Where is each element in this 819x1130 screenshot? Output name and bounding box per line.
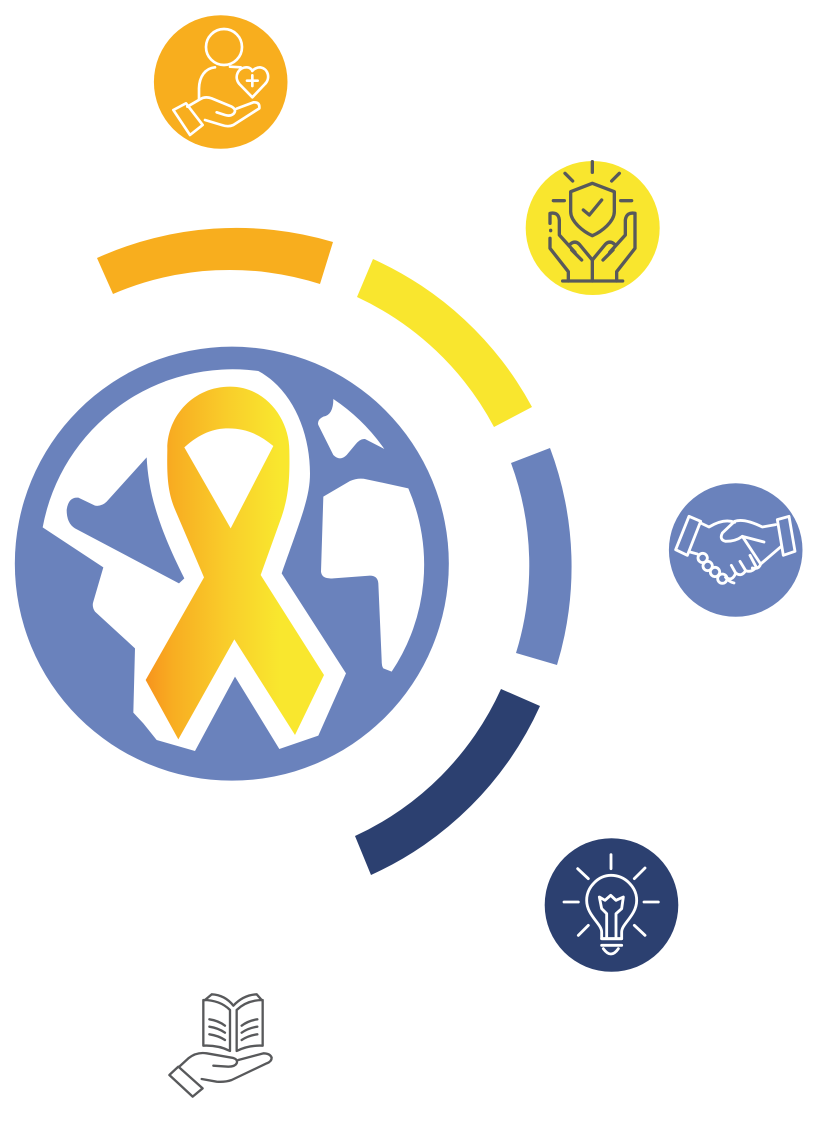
awareness ribbon bbox=[146, 387, 324, 739]
icon: hands protecting shield bbox=[526, 161, 660, 295]
arc segment: yellow bbox=[357, 259, 532, 427]
icon: handshake bbox=[669, 483, 802, 617]
arc segment: navy bbox=[355, 689, 540, 875]
icon: light bulb bbox=[545, 838, 678, 972]
central globe with ribbon bbox=[15, 347, 449, 781]
globe land: main continent bbox=[43, 369, 346, 751]
globe land: northern island bbox=[318, 399, 384, 458]
globe land: eastern continent bbox=[321, 479, 424, 672]
globe disc bbox=[15, 347, 449, 781]
arc segment: light blue bbox=[511, 448, 572, 665]
arc segment: orange bbox=[97, 228, 333, 294]
icon: person in caring hand bbox=[154, 15, 288, 149]
icon: open book on hand bbox=[169, 994, 272, 1097]
